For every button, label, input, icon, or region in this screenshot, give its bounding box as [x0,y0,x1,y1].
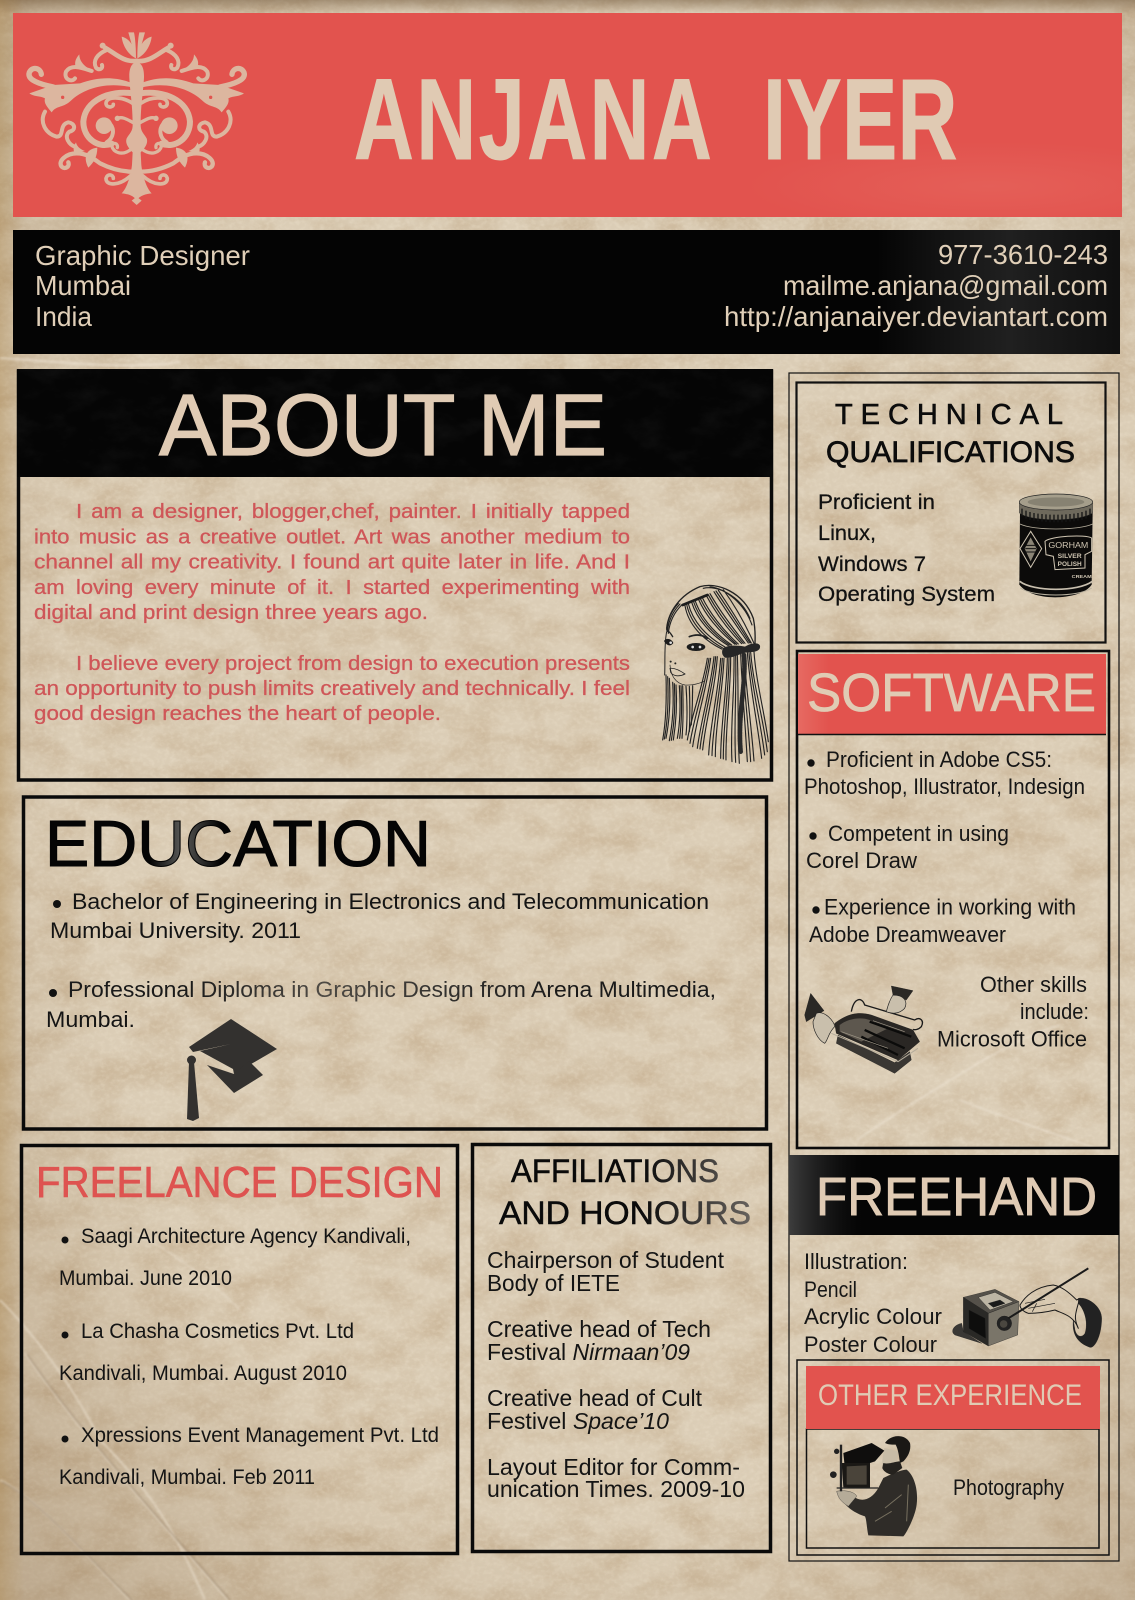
name title [354,56,957,184]
list: honours: Body of IETE [487,1270,620,1296]
panel: affiliations and honours [472,1144,770,1552]
text: technical skills [818,491,995,606]
list: software skills [804,747,1085,947]
text: contact details [724,239,1108,332]
icon: graduation cap [187,1019,277,1121]
text: freehand media: Poster Colour [804,1332,937,1357]
text: technical skills: Linux, [818,522,876,545]
list: software skills: Proficient in Adobe CS5: [826,747,1052,772]
icon: photographer with camera [830,1436,917,1536]
text: diploma [46,977,716,1032]
name title: IYER [763,56,957,184]
text: role and location: India [35,301,92,332]
panel: software [797,651,1109,1148]
text: other skills: Microsoft Office [937,1026,1087,1052]
panel: freehand [789,1155,1119,1357]
text: degree: Mumbai University. 2011 [50,918,301,943]
text: contact details: mailme.anjana@gmail.com [783,270,1108,301]
text: photography: Photography [953,1475,1064,1500]
icon: damask ornament [29,32,244,205]
list: freelance clients: Xpressions Event Management Pvt. Ltd [81,1424,439,1447]
text: freehand media: Illustration: [804,1249,908,1274]
contact bar [13,230,1120,354]
text: role and location: Graphic Designer [35,240,250,271]
list: honours: Creative head of Cult [487,1385,703,1411]
text: degree: Bachelor of Engineering in Electronics and Telecommunication [72,889,709,914]
heading: technical: TECHNICAL [835,399,1063,431]
text: degree [50,889,709,943]
list: honours: Festival Nirmaan’09 [487,1339,690,1365]
list: honours: unication Times. 2009-10 [487,1476,745,1502]
text: technical skills: Windows 7 [818,553,926,576]
list: software skills: Experience in working with [824,894,1076,920]
right column frame [789,373,1119,1561]
text: freehand media [804,1249,942,1357]
heading: software: SOFTWARE [807,663,1096,723]
text: contact details: http://anjanaiyer.deviantart.com [724,301,1108,332]
heading: qualifications: QUALIFICATIONS [826,436,1075,469]
list: freelance clients: La Chasha Cosmetics Pvt. Ltd [81,1320,354,1343]
list: honours: Layout Editor for Comm- [487,1454,740,1480]
heading: freelance design: FREELANCE DESIGN [36,1158,443,1207]
text: technical skills: Proficient in [818,491,935,514]
icon: polish tin: GORHAM [1048,540,1088,550]
icon: hand with brush and paint box [953,1268,1102,1347]
list: freelance clients: Kandivali, Mumbai. Feb 2011 [59,1466,315,1489]
panel: technical qualifications [796,382,1106,642]
list: honours [487,1247,745,1502]
text: technical skills: Operating System [818,583,995,606]
text: role and location: Mumbai [35,270,131,301]
icon: polish tin: POLISH [1058,561,1082,568]
text: about paragraphs: an opportunity to push limits creatively and technically. I feel [34,677,630,700]
list: software skills: Corel Draw [806,848,917,873]
text: other skills: include: [1020,999,1089,1024]
name title: ANJANA [354,56,712,184]
text: role and location [35,240,250,332]
heading: affiliations and honours: AND HONOURS [499,1195,751,1231]
text: about paragraphs: I believe every project from design to execution presents [76,652,630,675]
panel: other experience [797,1360,1109,1555]
text: about paragraphs: digital and print design three years ago. [34,601,428,624]
text: other skills: Other skills [980,972,1087,997]
heading: other experience [806,1366,1100,1429]
text: diploma: Professional Diploma in Graphic Design from Arena Multimedia, [68,977,716,1002]
list: honours: Creative head of Tech [487,1316,711,1342]
text: contact details: 977-3610-243 [938,239,1108,270]
text: about paragraphs: am loving every minute of it. I started experimenting with [34,576,630,599]
list: freelance clients: Saagi Architecture Agency Kandivali, [81,1225,411,1248]
heading: affiliations and honours: AFFILIATIONS [511,1153,719,1189]
icon: polish tin: SILVER [1058,553,1082,560]
heading: other experience: OTHER EXPERIENCE [818,1379,1082,1412]
list: honours: Chairperson of Student [487,1247,725,1273]
text: about paragraphs: channel all my creativity. I found art quite later in life. And I [34,550,630,574]
list: freelance clients [59,1225,439,1489]
icon: printing press with hands [805,986,922,1073]
icon: polish tin [1019,494,1093,597]
heading: freehand: FREEHAND [816,1167,1097,1227]
text: freehand media: Pencil [804,1277,857,1302]
icon: girl illustration [663,585,768,763]
text: about paragraphs: into music as a creative outlet. Art was another medium to [34,526,630,548]
heading: about me: ABOUT ME [159,377,607,474]
panel: freelance design [22,1146,458,1554]
list: freelance clients: Kandivali, Mumbai. August 2010 [59,1362,347,1385]
list: software skills: Adobe Dreamweaver [809,922,1006,947]
text: freehand media: Acrylic Colour [804,1304,942,1329]
panel: education [24,797,766,1129]
text: about paragraphs: good design reaches the heart of people. [34,702,441,725]
list: freelance clients: Mumbai. June 2010 [59,1267,232,1290]
icon: polish tin: CREAM [1072,574,1092,580]
list: software skills: Photoshop, Illustrator, Indesign [804,774,1085,799]
text: diploma: Mumbai. [46,1007,135,1032]
heading: education: EDUCATION [45,807,431,880]
text: about paragraphs: I am a designer, blogger,chef, painter. I initially tapped [76,500,630,523]
list: honours: Festivel Space’10 [487,1408,669,1434]
list: software skills: Competent in using [828,821,1009,846]
heading: affiliations and honours [499,1153,751,1231]
text: other skills [937,972,1089,1052]
header banner [13,13,1122,217]
panel: about me [17,369,773,780]
text: about paragraphs [34,500,630,725]
